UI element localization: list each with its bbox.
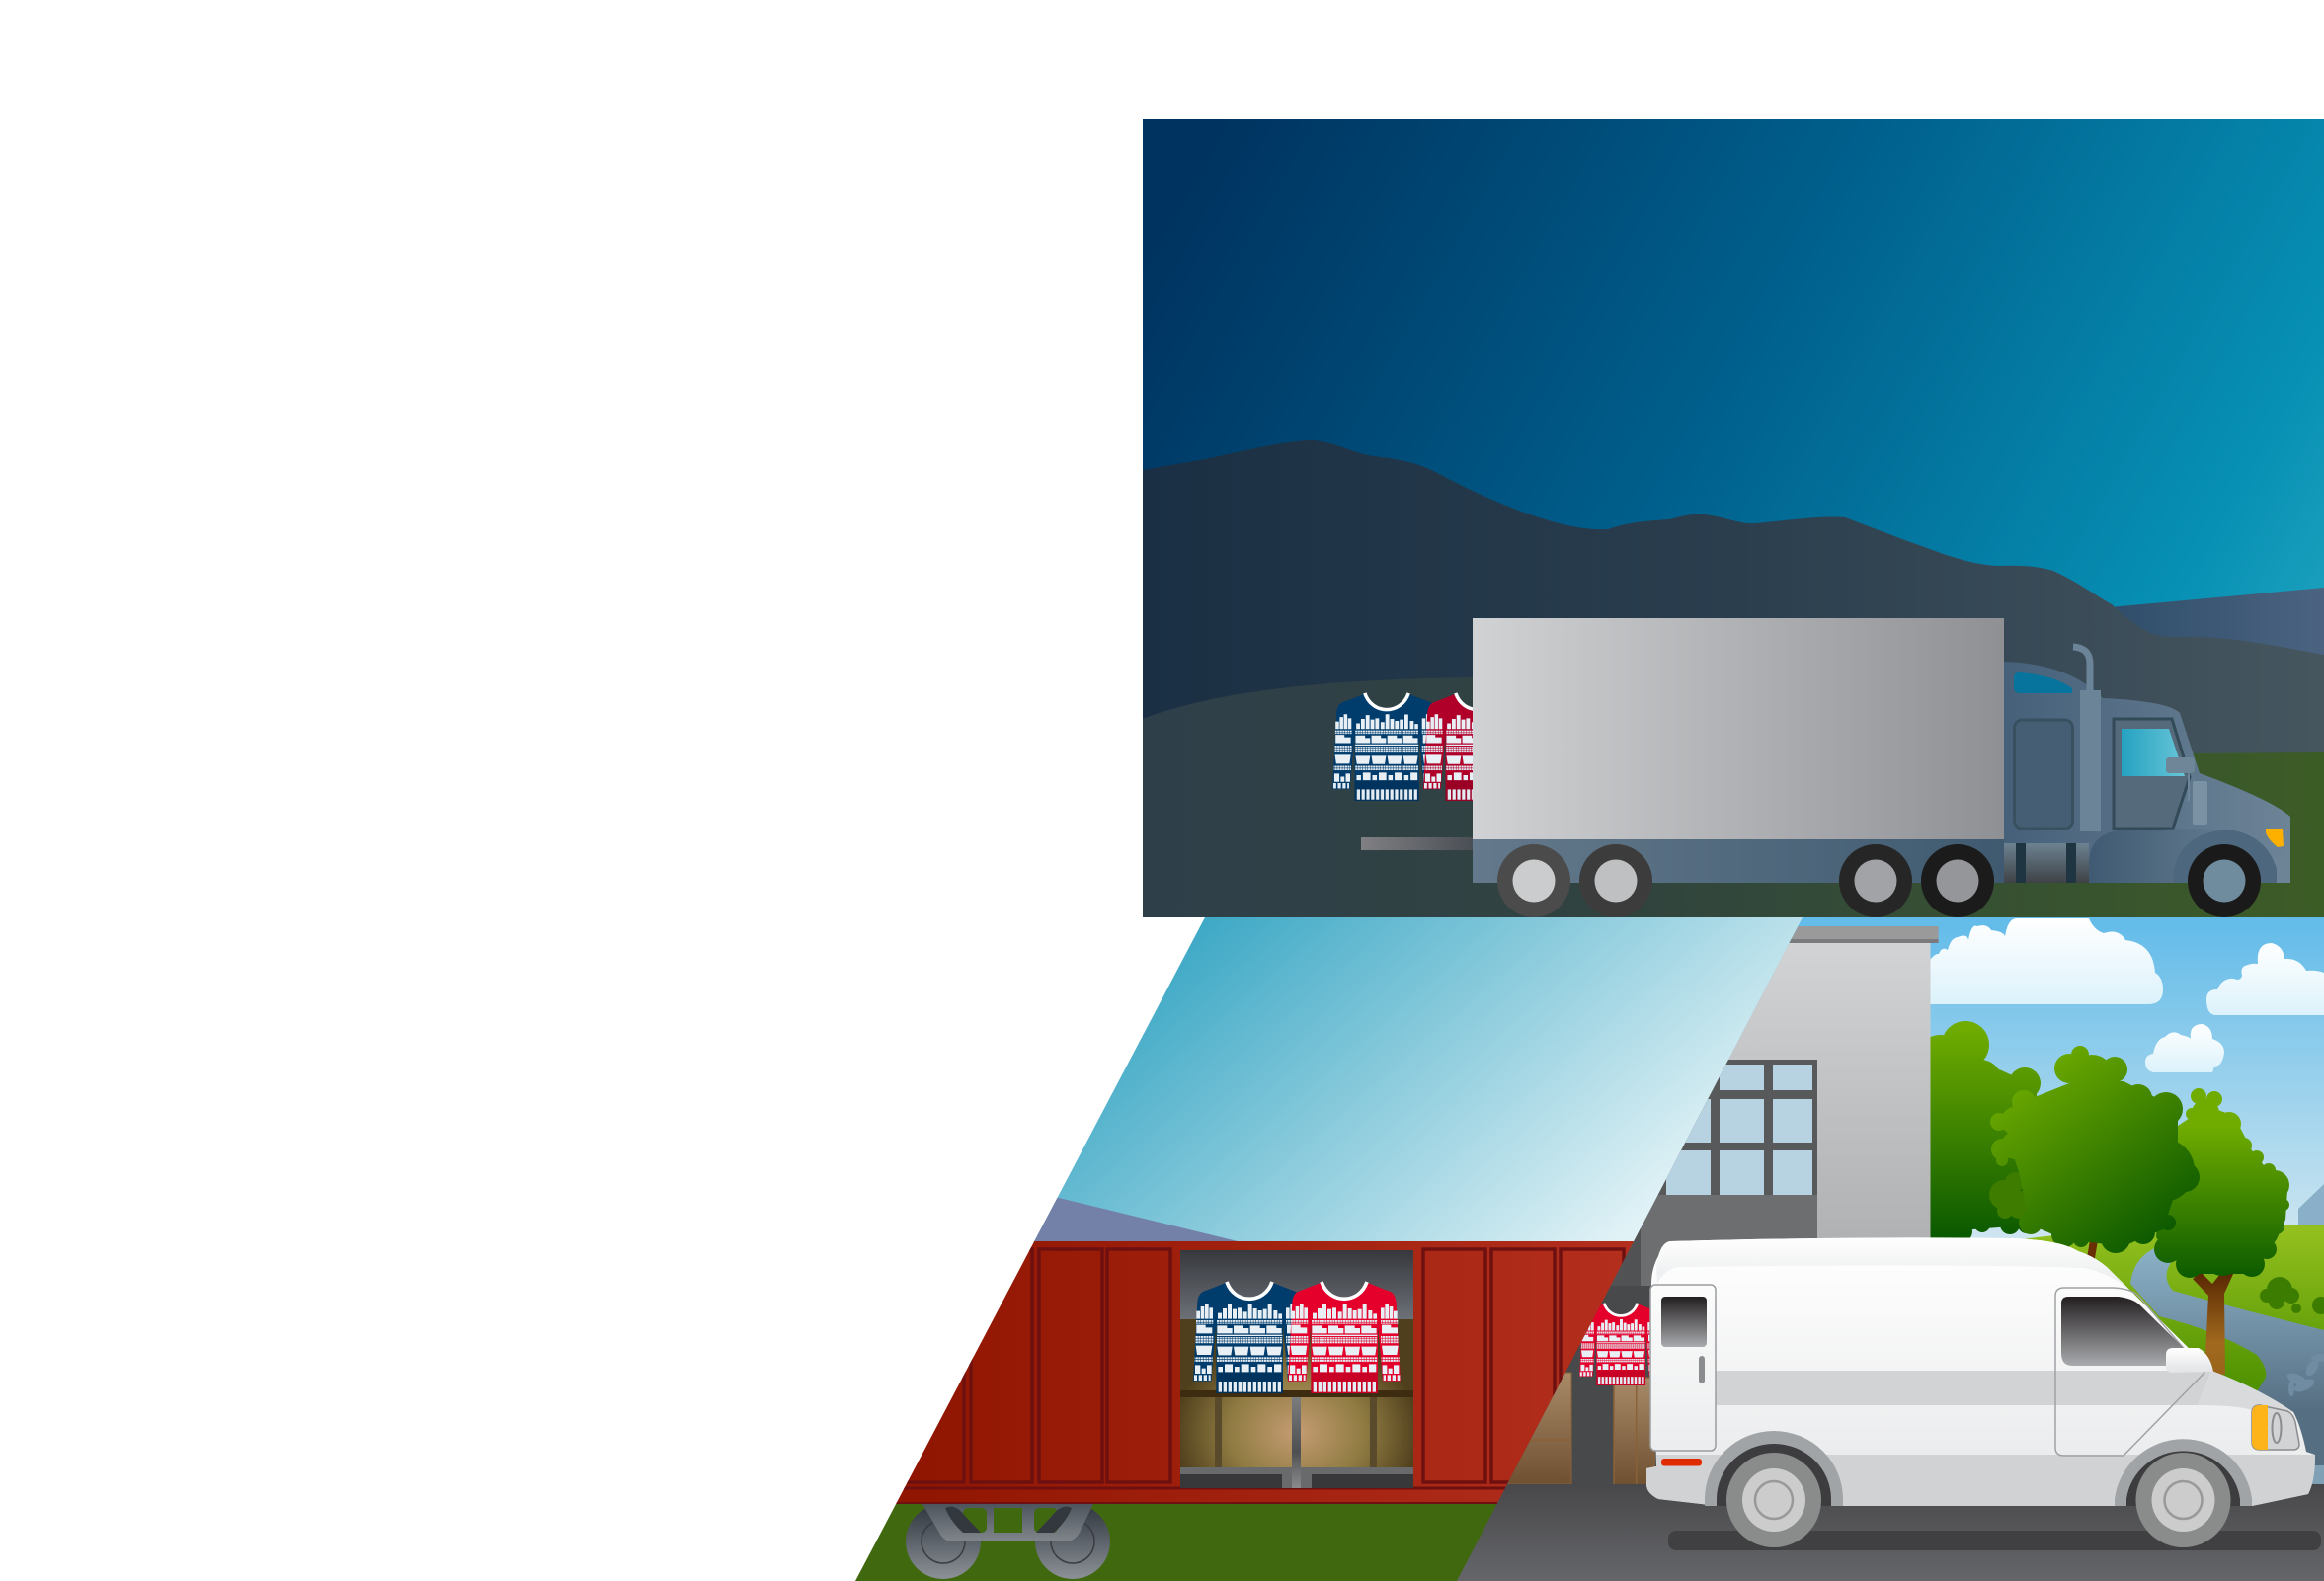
sweater: navy, trailing the truck	[1332, 693, 1441, 801]
amber light	[2266, 829, 2284, 847]
van lower body	[1646, 1455, 2315, 1506]
hood shade	[2198, 1371, 2293, 1412]
dark mountain range	[1143, 440, 2324, 753]
sleeper window	[2014, 672, 2072, 693]
trailer stand	[1361, 837, 1473, 850]
warehouse lower block	[1432, 1195, 1817, 1294]
open door interior	[1180, 1250, 1413, 1488]
loading dock interior	[1432, 1286, 1709, 1485]
van stripe	[1716, 1371, 2278, 1405]
exhaust stack	[2080, 690, 2101, 831]
cloud: small	[2145, 1024, 2224, 1072]
far mountain	[2114, 588, 2324, 655]
window frame	[1630, 1060, 1817, 1195]
warehouse roof cap	[1768, 926, 1939, 943]
cloud: large	[1930, 918, 2163, 1004]
tree: right	[2154, 1088, 2289, 1278]
road	[1432, 1484, 2324, 1581]
bushes	[2260, 1277, 2324, 1314]
leaf shadows on river	[2285, 1354, 2324, 1396]
van hood	[2198, 1371, 2306, 1454]
boxcar body	[869, 1241, 1679, 1504]
trailer box	[1473, 618, 2004, 839]
side mirror	[2166, 1348, 2213, 1373]
fuel tank	[2004, 843, 2089, 883]
tree: right crown trunk	[2193, 1269, 2234, 1375]
warehouse wall	[1679, 943, 1930, 1259]
ground	[1143, 677, 2324, 917]
chassis	[1473, 839, 2004, 883]
clouds	[1930, 918, 2324, 1072]
distant mountain	[1027, 1197, 1242, 1242]
delivery van	[1646, 1237, 2315, 1547]
front door outline	[2055, 1288, 2204, 1456]
van body	[1646, 1237, 2315, 1506]
wheel arch	[2173, 830, 2277, 883]
exhaust pipe	[2073, 647, 2090, 691]
headlight	[2252, 1405, 2299, 1450]
sweater: red, in boxcar	[1288, 1282, 1401, 1393]
mirror	[2166, 757, 2195, 801]
rear wheel	[1705, 1431, 1843, 1547]
van shadow	[1668, 1531, 2321, 1550]
tail light	[1661, 1459, 1702, 1465]
truck	[1473, 618, 2290, 917]
front wheel	[2115, 1439, 2252, 1547]
sweater: red, trailing the truck	[1423, 692, 1473, 801]
tree: centre	[1990, 1046, 2200, 1253]
tree: left	[1914, 1021, 2041, 1242]
front window	[2061, 1297, 2185, 1366]
rear window	[1661, 1297, 1707, 1347]
cab window	[2122, 729, 2185, 776]
van roof	[1656, 1237, 2128, 1290]
panel: warehouse and delivery van	[1432, 917, 2324, 1581]
cloud: right	[2206, 943, 2324, 1015]
sweater: red, at dock	[1579, 1304, 1662, 1385]
rail bogie	[906, 1504, 1110, 1579]
crates	[1508, 1373, 1654, 1485]
sleeper panel	[2015, 720, 2072, 829]
sweater: navy, in boxcar	[1193, 1282, 1306, 1393]
front fender	[2089, 830, 2181, 883]
daytime sky	[1033, 917, 1803, 1243]
ground	[855, 1504, 1497, 1581]
river	[2130, 1246, 2324, 1491]
warehouse dark edge	[1432, 1195, 1641, 1294]
lawn hills	[2022, 1225, 2324, 1491]
side fairing	[2193, 781, 2207, 825]
river far band	[2306, 1465, 2324, 1491]
panel: night highway with truck	[1143, 119, 2324, 917]
door handle	[1699, 1356, 1705, 1383]
panel: freight train	[840, 917, 1877, 1581]
rear door	[1650, 1285, 1716, 1451]
shrub	[1989, 1172, 2034, 1219]
door	[2114, 719, 2190, 829]
wheels	[1497, 844, 2261, 917]
window panes	[1666, 1065, 1812, 1195]
cab	[2004, 662, 2290, 861]
distant house	[2298, 1184, 2324, 1225]
night sky	[1143, 119, 2324, 606]
tree trunk: back trees	[2058, 1225, 2099, 1264]
sky	[1633, 917, 2324, 1243]
boxcar side panels	[869, 1249, 1679, 1503]
